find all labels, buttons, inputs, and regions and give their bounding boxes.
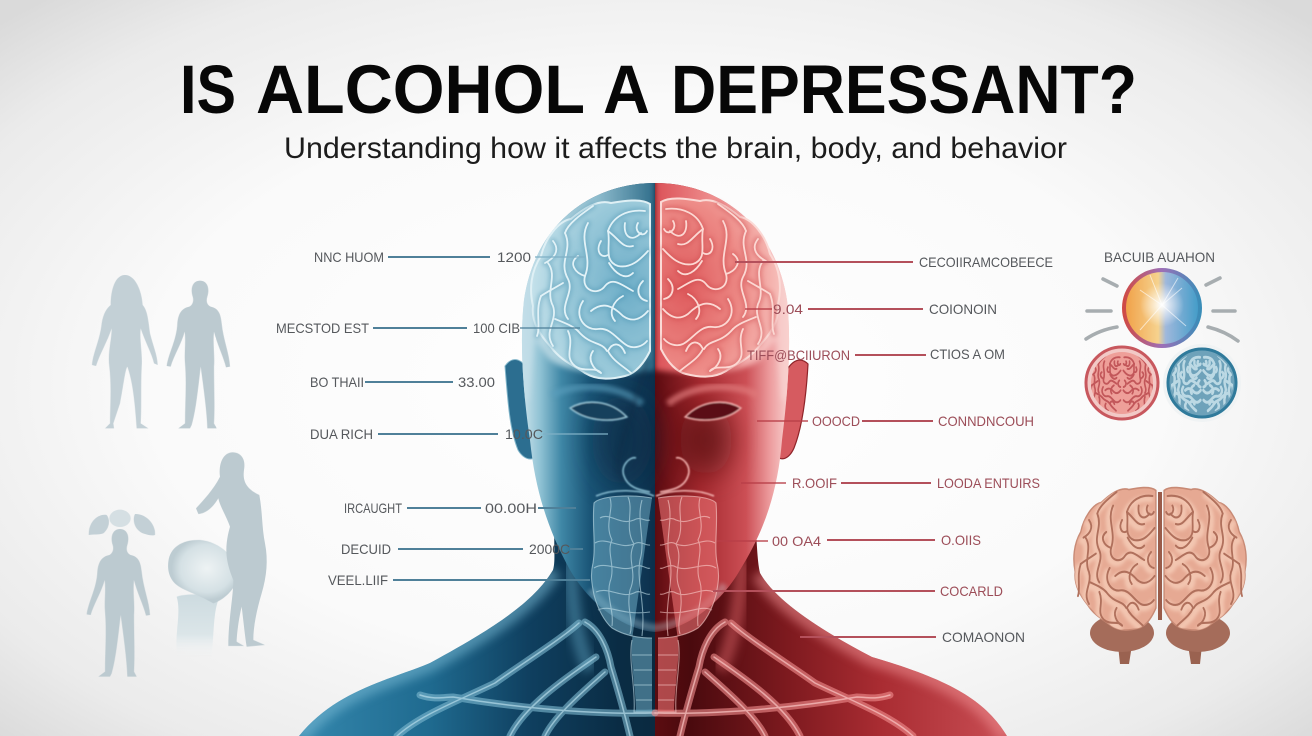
callout row 4: OOOCD (812, 413, 860, 429)
callout row 6: DECUID (341, 541, 391, 557)
callout row 1: CECOIIRAMCOBEECE (919, 254, 1053, 270)
subtitle: Understanding how it affects the brain, body, and behavior (284, 132, 1067, 165)
callout row 4 (310, 426, 608, 442)
callout row 1 (314, 249, 585, 265)
callout row 6 (341, 541, 583, 557)
brain: blue hemisphere (531, 200, 650, 379)
icon: bubble organ (168, 540, 238, 657)
callout row 5: LOODA ENTUIRS (937, 475, 1040, 491)
icon: standing figure (87, 529, 150, 677)
neck and shoulders (299, 520, 1007, 736)
callout row 7: COCARLD (940, 583, 1003, 599)
callout row 3: CTIOS A OM (930, 346, 1005, 362)
icon: right ear (776, 360, 808, 459)
panel: central split head figure (299, 170, 1007, 736)
title: A (603, 51, 650, 128)
icon: male silhouette (167, 281, 230, 428)
callout row 2 (276, 320, 580, 336)
face with horizontal light falloff (522, 183, 790, 632)
callout row 3: 33.00 (458, 374, 495, 390)
panel: right callout labels (713, 254, 1053, 645)
icon: split colour circle (1124, 270, 1200, 346)
callout row 7: VEEL.LIIF (328, 572, 388, 588)
callout row 3 (747, 346, 1005, 363)
callout row 1: 1200 (497, 249, 531, 265)
callout row 6 (717, 532, 981, 549)
callout row 6: 00 OA4 (772, 533, 821, 549)
panel: right icon cluster (1086, 249, 1241, 422)
callout row 5 (344, 500, 576, 516)
callout row 4: 10.0C (505, 426, 543, 442)
icon: blue brain circle (1163, 344, 1241, 422)
throat structure translucent lobes (591, 496, 719, 712)
title: IS (180, 51, 236, 128)
callout row 6: 2000C (529, 541, 570, 557)
icon cluster heading: BACUIB AUAHON (1104, 249, 1215, 265)
callout row 2 (745, 301, 997, 317)
callout row 6: O.OIIS (941, 532, 981, 548)
panel: left grey silhouettes (87, 275, 267, 677)
callout row 4: CONNDNCOUH (938, 413, 1034, 429)
icon: lung organs (89, 510, 155, 535)
title: DEPRESSANT? (671, 51, 1137, 128)
callout row 3: BO THAII (310, 374, 364, 390)
callout row 4: DUA RICH (310, 426, 373, 442)
icon: radiating rays (1086, 278, 1238, 341)
callout row 8: COMAONON (942, 629, 1025, 645)
callout row 2: COIONOIN (929, 301, 997, 317)
callout row 3 (310, 374, 495, 390)
facial features: eyes and nose (570, 402, 741, 496)
title (180, 51, 1137, 128)
callout row 2: 100 CIB (473, 320, 520, 336)
callout row 5: IRCAUGHT (344, 500, 402, 516)
panel: left callout labels (276, 249, 608, 588)
callout row 2: 9.04 (773, 301, 803, 317)
icon: side profile figure (196, 452, 267, 647)
brain: red hemisphere (661, 198, 780, 377)
callout row 1: NNC HUOM (314, 249, 384, 265)
icon: female silhouette (92, 275, 158, 428)
callout row 5: R.OOIF (792, 475, 837, 491)
callout row 5: 00.00H (485, 500, 537, 516)
callout row 4 (757, 413, 1034, 429)
icon: red brain circle (1086, 347, 1158, 419)
icon: left ear (505, 360, 538, 459)
title: ALCOHOL (256, 51, 585, 128)
icon: anatomical brain (1074, 488, 1246, 664)
icon: collarbone and rib tubes (397, 622, 913, 736)
callout row 5 (741, 475, 1040, 491)
callout row 2: MECSTOD EST (276, 320, 369, 336)
callout row 3: TIFF@BCIIURON (747, 347, 850, 363)
